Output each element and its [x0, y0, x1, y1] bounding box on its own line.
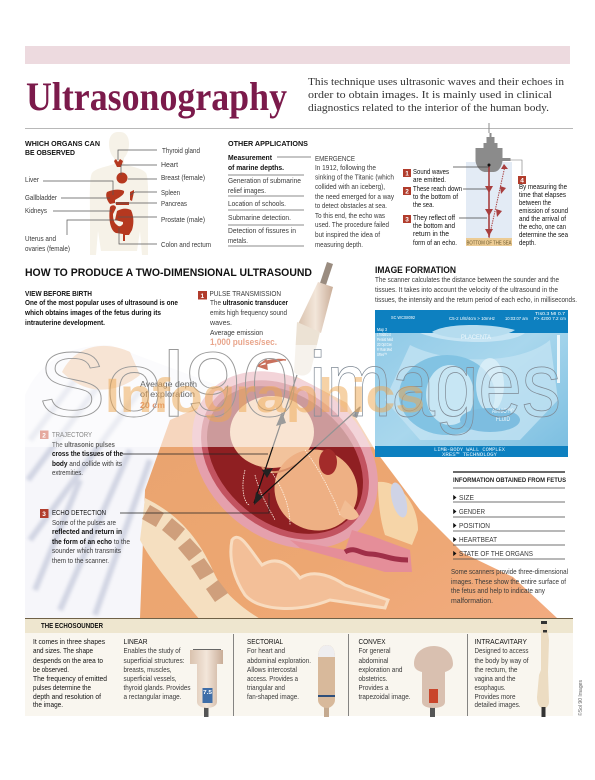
- column: intracavitary: [474, 621, 549, 717]
- organ labels: Breast (female): [161, 173, 205, 182]
- column: intracavitary: INTRACAVITARY: [474, 637, 527, 646]
- sonar steps: are emitted.: [413, 175, 446, 184]
- column: sectorial: SECTORIAL: [247, 637, 283, 646]
- sonar steps: 3: [405, 216, 409, 224]
- sonar steps: depth.: [519, 238, 536, 247]
- organs: [106, 159, 134, 241]
- panel: other applications: [228, 123, 568, 249]
- organ labels: [25, 146, 211, 253]
- text: view before birth: intrauterine development.: [25, 318, 105, 327]
- applications list: Submarine detection.: [228, 213, 291, 222]
- sonar diagram: ship, sea and sound waves: BOTTOM OF THE SEA: [466, 240, 512, 246]
- text: emergence: but inspired the idea of: [315, 230, 380, 239]
- sonar steps: return in the: [413, 229, 449, 238]
- callout: pulse transmission: 1: [200, 293, 204, 300]
- column: intracavitary: Designed to access: [474, 646, 529, 655]
- column: linear: thyroid glands. Provides: [124, 683, 191, 692]
- spine: [140, 498, 262, 620]
- body silhouette: [90, 132, 148, 255]
- sonar steps: to the bottom of: [413, 192, 458, 201]
- scan labels: LIMB-BODY WALL COMPLEX: [434, 446, 506, 453]
- heading: which organs: BE OBSERVED: [25, 148, 75, 157]
- scan labels: Persist Med: [377, 337, 393, 342]
- wash band: [25, 345, 375, 447]
- text: echosounder intro: It comes in three shapes: [33, 637, 105, 646]
- organ labels: Heart: [161, 160, 178, 169]
- text: emergence: In 1912, following the: [315, 163, 376, 172]
- header band: [25, 46, 570, 64]
- sonar steps: the bottom and: [413, 221, 455, 230]
- scan labels: SC WCS8092: [391, 315, 415, 320]
- sonar steps: and the arrival of: [519, 214, 566, 223]
- column: intracavitary: Provides more: [474, 692, 516, 701]
- callout: average depth: [140, 380, 197, 410]
- callout: trajectory: TRAJECTORY: [52, 430, 92, 439]
- text: emergence: the need emerged for a way: [315, 192, 394, 201]
- scan labels: Fr Rate:Med: [377, 347, 392, 352]
- column: linear: breasts, muscles,: [124, 665, 172, 674]
- column: intracavitary: esophagus.: [474, 683, 506, 692]
- applications list: metals.: [228, 236, 248, 245]
- callout: trajectory: body and collide with its: [52, 459, 122, 468]
- watermark: Sol90: [38, 334, 298, 436]
- sonar steps: 1: [405, 170, 409, 178]
- text: view before birth: [24, 289, 178, 327]
- text: echosounder intro: The frequency of emitted: [33, 674, 107, 683]
- sonar steps: Sound waves: [413, 167, 449, 176]
- column: linear: superficial structures:: [124, 656, 185, 665]
- scan labels: SRes™: [377, 352, 387, 357]
- scan labels: FLUID: [496, 416, 510, 423]
- column: linear: LINEAR: [124, 637, 148, 646]
- intro text: [308, 76, 565, 114]
- column: linear: a rectangular image.: [124, 692, 182, 701]
- text: view before birth: One of the most popular uses of ultrasound is one: [25, 298, 178, 307]
- sonar steps: They reflect off: [413, 213, 455, 222]
- sonar steps: the sea.: [413, 200, 434, 209]
- sheet: [25, 447, 160, 618]
- applications list: Location of schools.: [228, 199, 286, 208]
- applications list: of marine depths.: [228, 163, 284, 172]
- text: emergence: To this end, the echo was: [315, 211, 385, 220]
- column: sectorial: For heart and: [247, 646, 285, 655]
- callout: trajectory: 2: [42, 432, 46, 440]
- fetus: [230, 396, 359, 530]
- fetus info list: GENDER: [459, 507, 485, 516]
- scan labels: 10:03:07 am: [505, 316, 528, 321]
- text: emergence: sinking of the Titanic (which: [315, 172, 394, 182]
- callout: trajectory: extremities.: [52, 468, 83, 477]
- heading: the echosounder: THE ECHOSOUNDER: [41, 623, 103, 630]
- heading: which organs: WHICH ORGANS CAN: [25, 139, 100, 148]
- scan labels: F> 4200 7.2 cm: [534, 316, 566, 321]
- text: emergence: collided with an iceberg),: [315, 182, 385, 191]
- organ labels: ovaries (female): [25, 244, 70, 253]
- callout: trajectory: The ultrasonic pulses: [52, 440, 115, 449]
- icon: convex probe: [414, 646, 453, 717]
- text: image formation: tissues. It takes into account the velocity of the ultrasound in the: [375, 285, 558, 294]
- text: three-dimensional images: Some scanners provide three-dimensional: [451, 567, 568, 576]
- fetus info list: HEARTBEAT: [459, 535, 498, 544]
- text: echosounder intro: despends on the area to: [33, 656, 103, 665]
- copyright: ©Sol 90 Images: [577, 680, 584, 716]
- applications list: [228, 153, 311, 246]
- text: three-dimensional images: [451, 567, 568, 605]
- column: convex: obstetrics.: [358, 674, 388, 683]
- text: echosounder intro: be observed.: [33, 665, 69, 674]
- scan labels: PLACENTA: [461, 334, 492, 341]
- heading: which organs: [25, 139, 100, 157]
- column: convex: [358, 637, 453, 717]
- transducer: [294, 262, 333, 376]
- column: intracavitary: vagina and the: [474, 674, 516, 683]
- column: convex: trapezoidal image.: [358, 692, 411, 701]
- column: sectorial: Allows intercostal: [247, 665, 297, 674]
- callout: echo detection: Some of the pulses are: [52, 518, 116, 527]
- callout: pulse transmission: PULSE TRANSMISSION: [210, 289, 281, 298]
- column: sectorial: [247, 637, 335, 717]
- text: view before birth: VIEW BEFORE BIRTH: [25, 289, 92, 298]
- callout: pulse transmission: emits high frequency sound: [210, 308, 287, 317]
- scan labels: 170/dB/2.0: [377, 332, 391, 337]
- panel: which organs can be observed: [25, 132, 211, 255]
- panel: information obtained from fetus: INFORMATION OBTAINED FROM FETUS: [453, 477, 567, 484]
- text: three-dimensional images: the fetus and help to indicate any: [451, 586, 545, 595]
- organ leader lines: [43, 150, 157, 244]
- column: sectorial: access. Provides a: [247, 674, 298, 683]
- icon: linear probe: 7.5: [203, 690, 212, 696]
- skin: [140, 377, 557, 618]
- organ labels: Uterus and: [25, 234, 56, 243]
- scan labels: 2D Opt:Gen: [377, 342, 392, 347]
- intro text: diagnostics related to the interior of the human body.: [308, 102, 549, 114]
- sonar steps: By measuring the: [519, 182, 567, 191]
- text: three-dimensional images: malformation.: [451, 596, 493, 605]
- organ labels: Spleen: [161, 188, 180, 197]
- text: echosounder intro: the image.: [33, 700, 63, 709]
- scan labels: [377, 311, 566, 458]
- organ labels: Kidneys: [25, 206, 47, 215]
- callout: pulse transmission: [198, 289, 288, 347]
- organ labels: Pancreas: [161, 199, 187, 208]
- column: convex: abdominal: [358, 656, 389, 665]
- organ labels: Prostate (male): [161, 215, 205, 224]
- text: image formation: The scanner calculates the distance between the sounder and the: [375, 275, 559, 284]
- text: emergence: used. The procedure failed: [315, 220, 389, 229]
- column: sectorial: abdominal exploration.: [247, 656, 311, 665]
- applications list: Generation of submarine: [228, 176, 301, 185]
- callout: pulse transmission: 1,000 pulses/sec.: [210, 337, 277, 347]
- column: convex: Provides a: [358, 683, 388, 692]
- sonar steps: [403, 167, 568, 247]
- column: convex: For general: [358, 646, 391, 655]
- callout: echo detection: them to the scanner.: [52, 556, 109, 565]
- text: emergence: EMERGENCE: [315, 154, 355, 163]
- sonar steps: These reach down: [413, 184, 462, 193]
- sonar steps: form of an echo.: [413, 238, 457, 247]
- watermark: Infographics: [105, 370, 425, 423]
- heading: how to produce: HOW TO PRODUCE A TWO-DIMENSIONAL ULTRASOUND: [25, 267, 312, 279]
- bowel: [231, 537, 388, 608]
- organ labels: Colon and rectum: [161, 240, 211, 249]
- uterus: [192, 371, 378, 548]
- text: echosounder intro: [33, 637, 107, 709]
- scan labels: XRES™ TECHNOLOGY: [442, 451, 498, 458]
- fetus info list: POSITION: [459, 521, 490, 530]
- text: image formation: [375, 265, 577, 304]
- applications list: Detection of fissures in: [228, 226, 296, 235]
- organ labels: Gallbladder: [25, 193, 58, 202]
- bladder: [378, 482, 418, 545]
- callout: echo detection: 3: [42, 511, 46, 518]
- curved arrow on belly: [258, 359, 286, 369]
- text: three-dimensional images: images. These show the entire surface of: [451, 577, 566, 586]
- column: sectorial: triangular and: [247, 683, 285, 692]
- column: intracavitary: detailed images.: [474, 700, 521, 709]
- watermark: [38, 334, 561, 436]
- sonar steps: between the: [519, 198, 551, 207]
- sonar steps: 4: [520, 178, 524, 184]
- callout: echo detection: the form of an echo to the: [52, 537, 130, 546]
- callout: echo detection: [40, 493, 269, 565]
- column: convex: exploration and: [358, 665, 402, 674]
- callout: average depth: of exploration: [140, 390, 195, 399]
- column: intracavitary: the body by way of: [474, 656, 528, 665]
- icon: intracavitary probe: [537, 621, 549, 717]
- fetus info list: SIZE: [459, 493, 474, 502]
- text: image formation: IMAGE FORMATION: [375, 265, 456, 275]
- callout: echo detection: ECHO DETECTION: [52, 508, 106, 517]
- ultrasound scan image: [375, 310, 568, 458]
- scan labels: C5-2 U/8/4cm > 10mHz: [449, 316, 496, 321]
- callout: echo detection: sounder which transmits: [52, 546, 121, 555]
- callout: average depth: 20 cm: [140, 400, 165, 410]
- column: linear: [124, 637, 223, 717]
- scan labels: Map 3: [377, 327, 387, 332]
- fetus info list: [454, 493, 533, 558]
- fetus info list: STATE OF THE ORGANS: [459, 549, 533, 558]
- sonar diagram: ship, sea and sound waves: [453, 123, 522, 246]
- text: echosounder intro: and sizes. The shape: [33, 646, 93, 655]
- callout: echo detection: reflected and return in: [52, 527, 122, 536]
- sonar steps: emission of sound: [519, 206, 568, 215]
- organ labels: Thyroid gland: [162, 146, 200, 155]
- text: view before birth: which obtains images of the fetus during its: [24, 308, 161, 317]
- callout: trajectory: [40, 430, 268, 477]
- text: echosounder intro: pulses determine the: [33, 683, 91, 692]
- callout: pulse transmission: The ultrasonic transducer: [210, 298, 288, 307]
- illustration: pregnant body cross-section: [25, 262, 557, 620]
- applications list: Measurement: [228, 153, 273, 162]
- sonar steps: determine the sea: [519, 230, 568, 239]
- column: linear: superficial vessels,: [124, 674, 176, 683]
- organ labels: Liver: [25, 175, 40, 184]
- column: intracavitary: the rectum, the: [474, 665, 518, 674]
- icon: sectorial probe: [318, 645, 335, 717]
- sonar steps: the echo, one can: [519, 222, 566, 231]
- column: sectorial: fan-shaped image.: [247, 692, 299, 701]
- applications list: relief images.: [228, 186, 266, 195]
- panel: information obtained from fetus: [451, 472, 568, 605]
- sonar steps: time that elapses: [519, 190, 566, 199]
- text: echosounder intro: depth and resolution of: [33, 692, 101, 701]
- column: linear: Enables the study of: [124, 646, 180, 655]
- callout: average depth: Average depth: [140, 380, 197, 389]
- column: convex: CONVEX: [358, 637, 386, 646]
- sonar steps: 2: [405, 188, 409, 196]
- title: Ultrasonography: [26, 74, 287, 119]
- panel: the echosounder: [25, 618, 573, 717]
- scan labels: TIs0.3 MI 0.7: [535, 311, 566, 316]
- callout: trajectory: cross the tissues of the: [52, 449, 123, 458]
- cervix and placenta band: [290, 530, 412, 572]
- intro text: This technique uses ultrasonic waves and their echoes in: [308, 76, 565, 88]
- callout: pulse transmission: Average emission: [210, 328, 263, 337]
- heading: other applications: OTHER APPLICATIONS: [228, 139, 308, 148]
- intro text: order to obtain images. It is mainly used in clinical: [308, 89, 552, 101]
- ultrasound beam arrows: [254, 375, 361, 505]
- callout: pulse transmission: waves.: [209, 318, 232, 327]
- scan labels: AMNIOTIC: [492, 408, 514, 415]
- text: emergence: to detect obstacles at sea.: [315, 201, 387, 210]
- text: emergence: [315, 154, 394, 249]
- text: emergence: measuring depth.: [315, 240, 363, 249]
